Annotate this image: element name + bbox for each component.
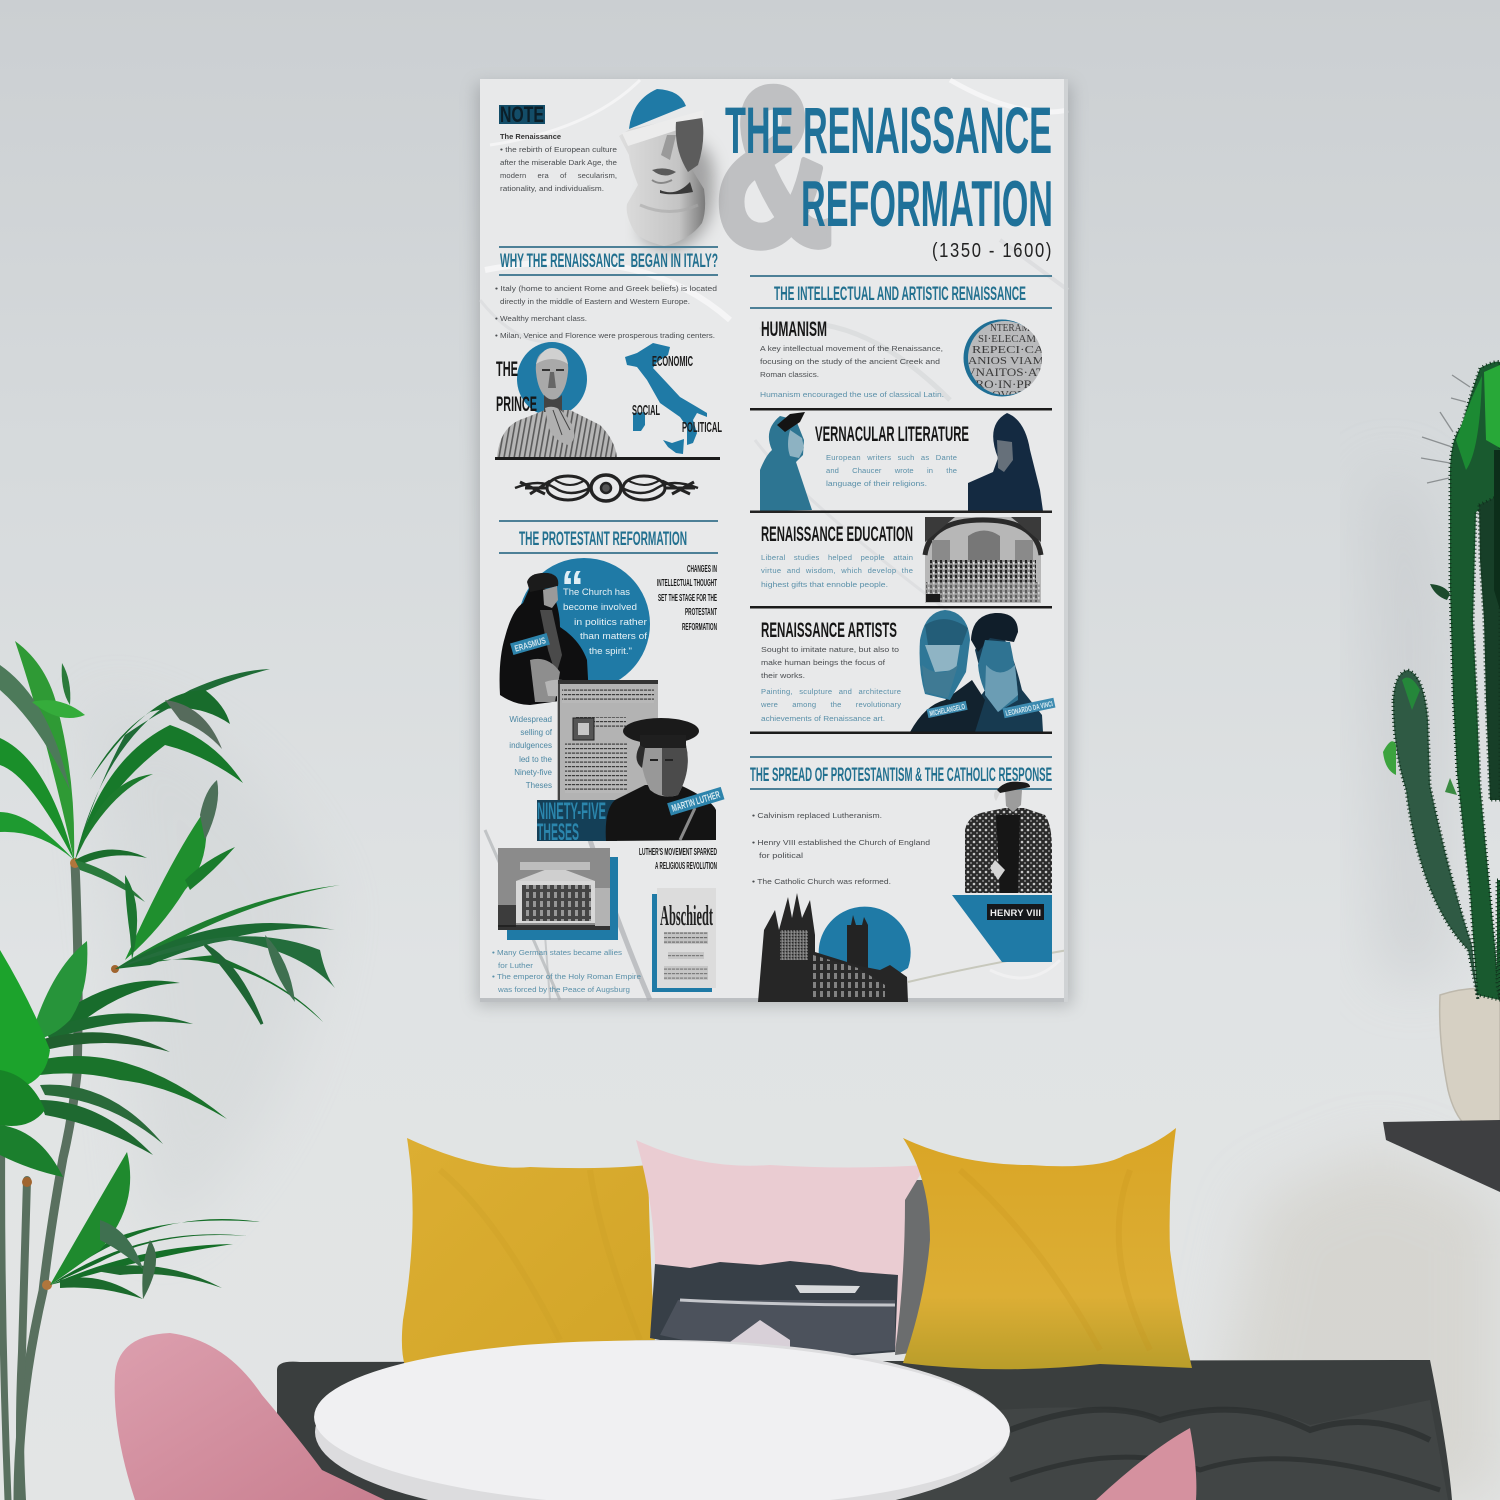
label panel: Henry VIII: HENRY VIII (990, 908, 1041, 919)
icon: latin stone inscription circle: PRO·IN·PRO (968, 377, 1042, 391)
section: the protestant reformation: INTELLECTUAL THOUGHT (657, 578, 717, 589)
lower middle frond (0, 941, 227, 1177)
changes caption (657, 564, 717, 633)
map labels (632, 353, 722, 436)
plant stems (2, 863, 78, 1500)
panel: vernacular literature: VERNACULAR LITERATURE (815, 423, 969, 446)
name tags: Michelangelo and Leonardo da Vinci: MICHELANGELO (929, 702, 966, 718)
section: the protestant reformation: A RELIGIOUS REVOLUTION (655, 861, 717, 872)
panel: vernacular literature: European writers such as Dante (826, 453, 957, 462)
note block: rationality, and individualism. (500, 184, 604, 193)
bullet list: • Henry VIII established the Church of England (752, 838, 930, 847)
indulgences caption: led to the (519, 755, 553, 764)
panel: humanism: HUMANISM (761, 318, 827, 341)
quote circle: The Church has (563, 587, 630, 597)
date range: (1350 - 1600) (932, 240, 1053, 262)
panel: humanism: focusing on the study of the ancient Creek and (760, 357, 940, 366)
section: the protestant reformation: LUTHER'S MOVEMENT SPARKED (639, 847, 717, 858)
figure: Leonardo da Vinci (910, 610, 1055, 732)
bullet list: • Calvinism replaced Lutheranism. (752, 811, 882, 820)
bench cushion (277, 1360, 1452, 1500)
plant: tall dracaena on the left (0, 641, 340, 1500)
panel: renaissance artists: their works. (761, 671, 805, 680)
figure: Leonardo da Vinci: LEONARDO DA VINCI (1005, 699, 1054, 718)
indulgences caption: Widespread (509, 715, 552, 724)
wall shelf (1383, 1120, 1500, 1192)
bullet list: directly in the middle of Eastern and Western Europe. (500, 297, 690, 306)
indulgences caption (509, 715, 553, 790)
section: the protestant reformation: Abschiedt (660, 901, 713, 932)
section: the protestant reformation: SET THE STAGE FOR THE (658, 593, 717, 604)
figure: Erasmus (500, 573, 589, 705)
panel: humanism (760, 318, 1045, 401)
section: why the renaissance began in Italy (495, 246, 722, 460)
note block: after the miserable Dark Age, the (500, 158, 617, 167)
panel: renaissance artists: achievements of Renaissance art. (761, 714, 885, 723)
poster shadow (476, 84, 1072, 1006)
bullet list: • The Catholic Church was reformed. (752, 877, 891, 886)
section: the spread of protestantism and the catholic response (750, 756, 1052, 1002)
panel: renaissance artists: Painting, sculpture and architecture (761, 687, 901, 696)
panel: renaissance education: RENAISSANCE EDUCATION (761, 523, 913, 546)
panel: humanism: Humanism encouraged the use of classical Latin. (760, 390, 944, 399)
quote circle: in politics rather (574, 617, 647, 627)
map labels: POLITICAL (682, 419, 722, 436)
image: baroque church facade (498, 848, 618, 940)
section heading: WHY THE RENAISSANCE BEGAN IN ITALY? (500, 251, 718, 272)
ampersand: & (714, 40, 834, 294)
panel: humanism: A key intellectual movement of the Renaissance, (760, 344, 943, 353)
panel: renaissance education: highest gifts that ennoble people. (761, 580, 888, 589)
image: printed Ninety-five Theses page (557, 680, 658, 800)
map labels: ECONOMIC (652, 353, 693, 370)
figure: Chaucer (968, 413, 1043, 511)
name tags: Michelangelo and Leonardo da Vinci (927, 701, 968, 719)
title (725, 93, 1053, 240)
pillow: pink and dark print (636, 1140, 926, 1362)
cactus highlights and gaps (1383, 365, 1500, 795)
icon: marble bust with blue dome (619, 89, 714, 250)
figure: Henry VIII (965, 782, 1052, 893)
indulgences caption: selling of (520, 728, 553, 737)
panel: renaissance education: virtue and wisdom, which develop the (761, 566, 913, 575)
section: the protestant reformation: REFORMATION (682, 622, 717, 633)
pillow: left yellow (402, 1138, 655, 1366)
bullet list: • Milan, Venice and Florence were prosperous trading centers. (495, 331, 715, 340)
bullet list: • Wealthy merchant class. (495, 314, 587, 323)
panel: vernacular literature (760, 412, 1043, 511)
panel: renaissance artists (760, 610, 1055, 732)
bullet list (495, 284, 717, 340)
pillow shadow behind the middle cushion (895, 1180, 935, 1355)
prince label: THE (496, 358, 518, 381)
section heading: THE INTELLECTUAL AND ARTISTIC RENAISSANCE (774, 284, 1026, 305)
figure: Martin Luther (606, 718, 724, 841)
bullets: German states: was forced by the Peace of Augsburg (497, 985, 630, 994)
section: the protestant reformation: PROTESTANT (685, 607, 717, 618)
image: Peace of Augsburg pamphlet (652, 888, 716, 992)
figure: Machiavelli, The Prince (497, 342, 617, 457)
note block: modern era of secularism, (500, 171, 617, 180)
bullets: German states: • The emperor of the Holy Roman Empire (492, 972, 641, 981)
icon: ornament divider (515, 475, 698, 501)
quote circle: than matters of (580, 631, 647, 641)
icon: latin stone inscription circle: SI·ELECAM (978, 334, 1036, 345)
label panel: Henry VIII (952, 895, 1052, 962)
bullets: German states: • Many German states became allies (492, 948, 622, 957)
upper frond (0, 641, 270, 902)
icon: latin stone inscription circle: VNAITOS·AT (966, 365, 1045, 379)
lower frond (50, 1152, 260, 1299)
title: THE RENAISSANCE (725, 93, 1052, 167)
round table (312, 1334, 1012, 1500)
poster wrinkles (480, 80, 1068, 1000)
bullet list (752, 811, 930, 886)
bullets: German states (492, 948, 641, 994)
icon: latin stone inscription circle: REPECI·CA (972, 344, 1044, 356)
quote circle: “ (561, 561, 584, 613)
panel: renaissance education (761, 517, 1041, 603)
ninety-five theses banner (537, 798, 617, 846)
panel: humanism: Roman classics. (760, 370, 819, 379)
name tag: Erasmus: ERASMUS (513, 635, 547, 654)
icon: latin stone inscription circle: ANIOS VIAM (968, 355, 1044, 367)
bullet list: for political (759, 851, 803, 860)
image: cathedral with blue circle (758, 893, 911, 1002)
poster (476, 40, 1072, 1006)
section: the protestant reformation (492, 520, 724, 994)
name tag: Martin Luther: MARTIN LUTHER (671, 789, 722, 815)
middle right frond (115, 780, 340, 1024)
ninety-five theses banner: NINETY-FIVE (537, 798, 606, 825)
indulgences caption: indulgences (509, 741, 552, 750)
chair: right pink (1096, 1428, 1196, 1500)
ninety-five theses banner: THESES (537, 819, 579, 846)
indulgences caption: Ninety-five (514, 768, 553, 777)
icon: latin stone inscription circle (964, 320, 1045, 401)
icon: latin stone inscription circle: LOVOR (985, 390, 1025, 401)
section heading: THE PROTESTANT REFORMATION (519, 529, 687, 550)
figure: Dante (760, 412, 812, 511)
poster sheet (480, 79, 1068, 1002)
panel: vernacular literature: language of their religions. (826, 479, 927, 488)
bullets: German states: for Luther (498, 961, 533, 970)
note block: The Renaissance (500, 132, 561, 141)
icon: latin stone inscription circle: NTERAM (990, 323, 1030, 334)
section: the intellectual and artistic renaissance (750, 275, 1055, 734)
title: REFORMATION (801, 167, 1053, 240)
plant: cactus on the right (1383, 362, 1500, 1138)
caption: religious revolution (639, 847, 717, 872)
image: School of Athens (925, 517, 1041, 603)
quote circle (518, 558, 650, 690)
section: the protestant reformation: CHANGES IN (687, 564, 717, 575)
bullet list: • Italy (home to ancient Rome and Greek beliefs) is located (495, 284, 717, 293)
section heading: THE SPREAD OF PROTESTANTISM & THE CATHOLIC RESPONSE (750, 765, 1052, 786)
map of Italy (625, 343, 707, 454)
panel: renaissance artists: Sought to imitate nature, but also to (761, 645, 899, 654)
prince label: PRINCE (496, 393, 537, 416)
map labels: SOCIAL (632, 402, 660, 419)
note block (499, 102, 617, 193)
cactus stems (1393, 362, 1500, 1000)
prince label (496, 358, 537, 416)
panel: renaissance artists: make human beings the focus of (761, 658, 886, 667)
panel: renaissance artists: RENAISSANCE ARTISTS (761, 619, 897, 642)
indulgences caption: Theses (526, 781, 552, 790)
note block: • the rebirth of European culture (500, 145, 617, 154)
pillow: right yellow (903, 1128, 1192, 1369)
figure: Michelangelo (910, 680, 985, 732)
cactus pot (1440, 988, 1500, 1138)
chair: left pink (115, 1333, 385, 1500)
panel: renaissance education: Liberal studies helped people attain (761, 553, 913, 562)
quote circle: the spirit." (589, 646, 632, 656)
note label: NOTE (500, 102, 544, 127)
panel: renaissance artists: were among the revolutionary (760, 700, 901, 709)
quote circle: become involved (563, 602, 637, 612)
panel: vernacular literature: and Chaucer wrote in the (826, 466, 957, 475)
